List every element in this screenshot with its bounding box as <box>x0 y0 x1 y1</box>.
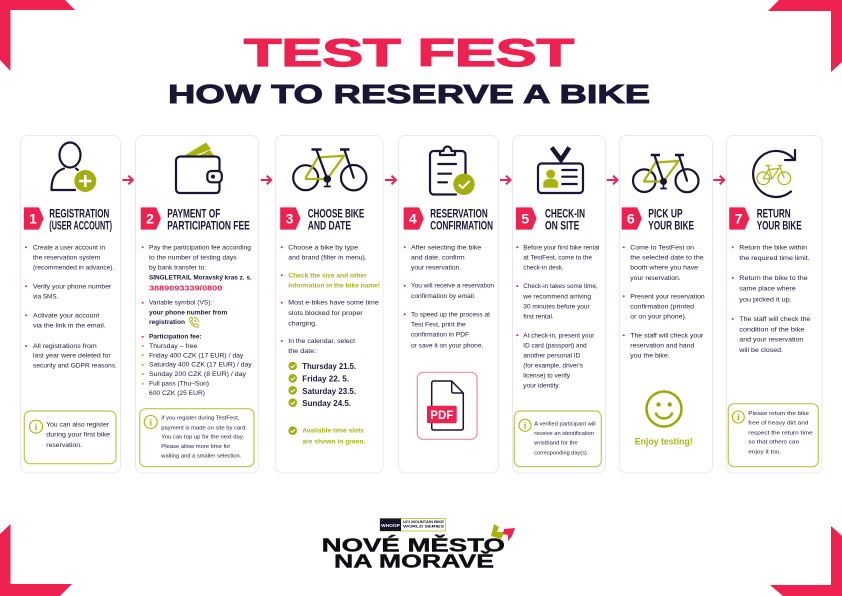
bullet list: (for example, driver's <box>523 363 584 370</box>
bullet list: you picked it up. <box>739 296 792 303</box>
payment instructions <box>142 244 252 341</box>
payment instructions: 3889093339/0800 <box>149 284 222 293</box>
info callout: free of heavy dirt and <box>748 421 808 427</box>
date list <box>288 361 356 408</box>
bullet list: Before your first bike rental <box>523 244 600 251</box>
info callout: You can top up for the next day. <box>161 435 244 441</box>
heading: PAYMENT OF <box>167 208 220 220</box>
badge: number 2 <box>141 208 160 229</box>
info callout: If you register during TestFest, <box>161 416 240 422</box>
badge: number 2: 2 <box>146 210 154 226</box>
panel: step 1 registration <box>20 136 120 473</box>
bullet list: or save it on your phone. <box>411 342 483 349</box>
badge: number 4: 4 <box>409 210 417 226</box>
icon: clipboard <box>430 146 475 195</box>
bullet list: your reservation. <box>411 265 461 272</box>
bullet list: the reservation system <box>33 255 100 262</box>
fee list: Sunday 200 CZK (8 EUR) / day <box>149 371 247 378</box>
info callout: corresponding day(s). <box>534 450 589 456</box>
info callout: Please allow more time for <box>161 444 230 450</box>
badge: number 4 <box>404 208 423 229</box>
bullet list: same place where <box>739 285 796 292</box>
bullet list: condition of the bike <box>739 326 805 333</box>
badge: number 7: 7 <box>735 210 743 226</box>
heading: AND DATE <box>308 220 351 232</box>
bullet list: information in the bike name! <box>288 283 380 290</box>
heading <box>308 208 365 232</box>
heading <box>430 208 493 232</box>
bullet list: Check the size and other <box>288 272 367 279</box>
bullet list <box>516 244 600 390</box>
bullet list: After selecting the bike <box>411 244 482 251</box>
logo wordmark: NOVÉ MĚSTO <box>322 535 505 556</box>
info callout: receive an identification <box>534 431 594 437</box>
icon: bicycle <box>633 155 698 192</box>
bullet list: the date: <box>288 348 316 355</box>
arrow <box>385 176 396 184</box>
bullet list: (recommended in advance). <box>33 265 114 272</box>
bullet list: slots blocked for proper <box>288 310 364 317</box>
info callout: respect the return time <box>748 430 813 436</box>
bullet list: first rental. <box>523 314 554 321</box>
info callout: reservation. <box>46 442 82 449</box>
bullet list: the selected date to the <box>630 255 704 262</box>
panel: step 7 return <box>726 136 822 473</box>
bullet list: your identity. <box>523 383 560 390</box>
heading: CHECK-IN <box>545 208 585 220</box>
badge: number 3 <box>281 208 300 229</box>
arrow <box>607 176 618 184</box>
fee list: Thursday – free <box>149 343 198 350</box>
payment instructions: Participation fee: <box>149 334 202 341</box>
icon: smiley <box>646 392 682 426</box>
icon: return arrow with bike <box>753 150 795 197</box>
info callout: You can also register <box>46 421 110 428</box>
date list: Thursday 21.5. <box>302 361 356 371</box>
bullet list: ID card (passport) and <box>523 342 587 349</box>
heading: PARTICIPATION FEE <box>167 220 250 232</box>
bullet list <box>281 244 380 355</box>
bullet list <box>732 244 811 354</box>
bullet list: The staff will check the <box>739 316 811 323</box>
bullet list: Return the bike within <box>739 244 807 251</box>
info callout: i <box>35 422 38 432</box>
icon: PDF document: PDF <box>430 410 453 422</box>
panel: step 4 reservation confirmation <box>398 136 498 473</box>
bullet list: To speed up the process at <box>411 311 490 318</box>
info callout: payment is made on site by card. <box>161 425 247 431</box>
bullet list: Create a user account in <box>33 244 105 251</box>
bullet list: charging. <box>288 320 317 327</box>
badge: number 6: 6 <box>627 210 635 226</box>
bullet list: Verify your phone number <box>33 283 112 290</box>
bullet list: last year were deleted for <box>33 353 112 360</box>
heading: CHOOSE BIKE <box>308 208 365 220</box>
payment instructions: to the number of testing days <box>149 255 237 262</box>
arrow <box>713 176 724 184</box>
bullet list: Return the bike to the <box>739 275 808 282</box>
bullet list: confirmation by email. <box>411 293 476 300</box>
heading <box>648 208 694 232</box>
panel: step 5 check-in <box>512 136 606 473</box>
bullet list: reservation and hand <box>630 342 695 349</box>
corner bracket: top right <box>768 0 842 72</box>
logo wordmark: NA MORAVĚ <box>334 550 494 571</box>
fee list <box>142 343 252 397</box>
info callout <box>140 409 254 467</box>
icon: user with plus <box>52 142 96 192</box>
bullet list: The staff will check your <box>630 332 704 339</box>
event logo <box>322 518 515 571</box>
availability note <box>288 426 365 445</box>
date list: Saturday 23.5. <box>302 386 356 396</box>
bullet list: security and GDPR reasons. <box>33 363 117 370</box>
heading: REGISTRATION <box>49 208 109 220</box>
bullet list: or on your phone). <box>630 314 687 321</box>
series badge: WHOOP <box>381 523 401 529</box>
panel: step 2 payment <box>136 136 258 473</box>
bullet list: and brand (filter in menu). <box>288 255 367 262</box>
bullet list: Activate your account <box>33 312 99 319</box>
arrow <box>261 176 271 184</box>
bullet list: In the calendar, select <box>288 338 355 345</box>
info callout: so that others can <box>748 440 799 446</box>
heading: YOUR BIKE <box>757 220 802 232</box>
payment instructions: registration <box>149 319 185 326</box>
series badge: UCI MOUNTAIN BIKE <box>403 520 445 524</box>
fee list: Friday 400 CZK (17 EUR) / day <box>149 352 244 359</box>
fee list: Saturday 400 CZK (17 EUR) / day <box>149 362 252 369</box>
bullet list: will be closed. <box>738 347 783 354</box>
heading <box>545 208 585 232</box>
payment instructions: by bank transfer to: <box>149 265 206 272</box>
availability note: are shown in green. <box>302 438 365 445</box>
series badge: WORLD SERIES <box>403 524 445 528</box>
bullet list: your reservation. <box>630 275 681 282</box>
heading: CONFIRMATION <box>430 220 493 232</box>
subtitle: HOW TO RESERVE A BIKE <box>168 79 650 109</box>
bullet list: the required time limit. <box>739 255 810 262</box>
badge: number 5 <box>516 208 536 229</box>
payment instructions: Pay the participation fee according <box>149 244 251 251</box>
panel: step 3 choose bike <box>276 136 383 473</box>
bullet list: we recommend arriving <box>522 293 591 300</box>
corner bracket: top left <box>0 0 75 71</box>
corner bracket: bottom left <box>0 524 72 596</box>
bullet list <box>623 244 705 360</box>
bullet list: you the bike. <box>630 353 670 360</box>
closing message: Enjoy testing! <box>635 436 693 446</box>
bullet list: confirmation (printed <box>630 303 694 310</box>
icon: wallet <box>176 142 222 193</box>
bullet list: and your reservation <box>739 337 804 344</box>
bullet list: another personal ID <box>523 353 581 360</box>
date list: Friday 22. 5. <box>302 373 349 383</box>
badge: number 6 <box>622 208 641 229</box>
panel: step 6 pick up <box>620 136 712 473</box>
corner bracket: bottom right <box>770 526 842 596</box>
icon: bicycle <box>293 150 366 190</box>
bullet list: 30 minutes before your <box>523 303 591 310</box>
heading: YOUR BIKE <box>648 220 694 232</box>
bullet list: At check-in, present your <box>523 332 595 339</box>
info callout <box>728 404 818 467</box>
icon: ID badge <box>538 148 583 193</box>
badge: number 5: 5 <box>521 210 529 226</box>
info callout <box>24 411 116 464</box>
heading: (USER ACCOUNT) <box>49 220 112 232</box>
logo wordmark <box>322 535 505 571</box>
badge: number 3: 3 <box>286 210 294 226</box>
info callout: wristband for the <box>533 441 578 447</box>
heading <box>49 208 112 232</box>
bullet list: license) to verify <box>523 373 571 380</box>
series badge <box>380 518 446 531</box>
fee list: Full pass (Thu–Sun) <box>149 381 209 388</box>
bullet list: confirmation in PDF <box>411 332 469 339</box>
heading: PICK UP <box>648 208 683 220</box>
info callout <box>514 411 601 467</box>
bullet list: Choose a bike by type <box>288 244 358 251</box>
bullet list: Present your reservation <box>630 293 705 300</box>
info callout: enjoy it too. <box>748 449 782 455</box>
info callout: i <box>737 412 740 422</box>
fee list: 600 CZK (25 EUR) <box>149 390 205 397</box>
info callout: i <box>524 420 527 430</box>
logo chevrons <box>491 524 515 541</box>
bullet list: via SMS. <box>33 294 58 301</box>
availability note: Available time slots <box>302 428 364 435</box>
bullet list: You will receive a reservation <box>411 283 494 290</box>
bullet list: booth where you have <box>630 265 698 272</box>
badge: number 1 <box>24 208 43 229</box>
payment instructions: SINGLETRAIL Moravský kras z. s. <box>149 275 252 282</box>
heading: RESERVATION <box>430 208 488 220</box>
heading: RETURN <box>757 208 791 220</box>
bullet list: Most e-bikes have some time <box>288 300 379 307</box>
bullet list: All registrations from <box>33 343 97 350</box>
badge: number 7 <box>730 208 749 229</box>
arrow <box>122 176 133 184</box>
payment instructions: your phone number from <box>149 309 228 316</box>
bullet list: Come to TestFest on <box>630 244 694 251</box>
info callout: Please return the bike <box>748 411 810 417</box>
info callout: waiting and a smaller selection. <box>160 454 242 460</box>
bullet list <box>25 244 117 370</box>
bullet list: and date, confirm <box>411 255 465 262</box>
heading: ON SITE <box>545 220 580 232</box>
payment instructions: Variable symbol (VS): <box>149 300 212 307</box>
badge: number 1: 1 <box>29 210 37 226</box>
bullet list: Check-in takes some time, <box>523 283 598 290</box>
title: TEST FEST <box>244 32 574 75</box>
bullet list: at TestFest, come to the <box>523 255 592 262</box>
info callout: A verified participant will <box>534 421 596 427</box>
info callout: during your first bike <box>46 432 110 439</box>
bullet list: Test Fest, print the <box>411 321 466 328</box>
bullet list: via the link in the email. <box>33 323 106 330</box>
bullet list <box>404 244 494 349</box>
icon: PDF document <box>417 372 477 439</box>
info callout: i <box>149 417 152 427</box>
heading <box>167 208 250 232</box>
arrow <box>500 176 510 184</box>
date list: Sunday 24.5. <box>302 398 351 408</box>
heading <box>757 208 802 232</box>
bullet list: check-in desk. <box>523 265 564 272</box>
